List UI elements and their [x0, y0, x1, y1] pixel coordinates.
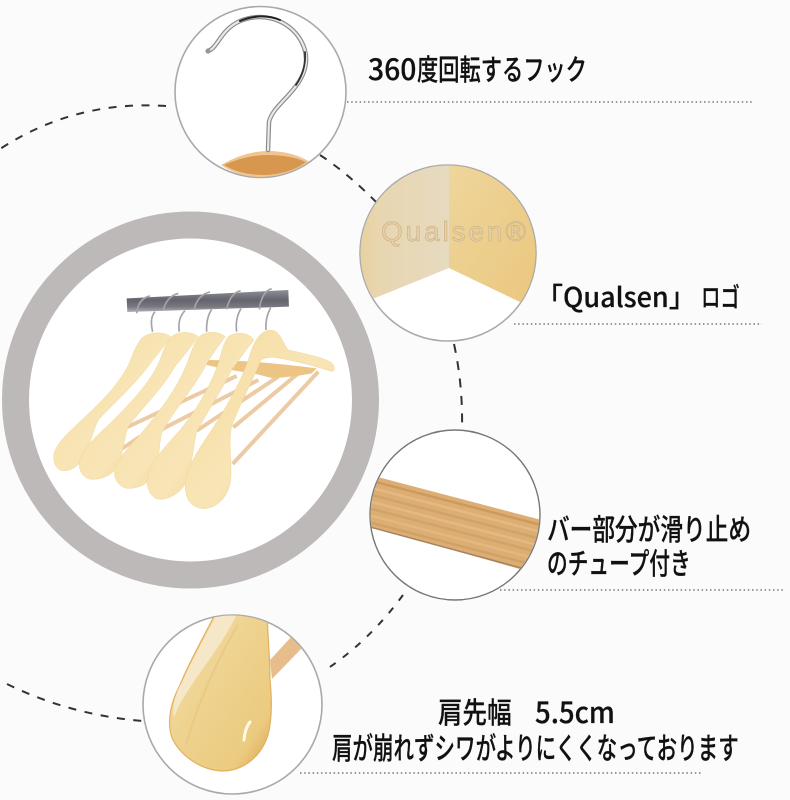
striped non-slip bar — [370, 478, 540, 569]
rail — [127, 290, 289, 312]
dashed connector: hook circle to logo circle — [320, 155, 378, 204]
right wood face — [449, 166, 536, 302]
dashed connector: left to hook circle — [0, 105, 166, 149]
label: logo: 「Qualsen」 — [536, 276, 696, 315]
dashed connector: logo circle to bar circle — [454, 344, 462, 430]
gloss highlight — [244, 722, 250, 740]
illustration: five wooden hangers on a rail — [54, 289, 334, 509]
hanger arm 4 — [147, 333, 254, 499]
paddle — [170, 612, 271, 771]
panel: shoulder detail circle — [143, 612, 322, 794]
panel: logo detail circle — [359, 164, 537, 342]
label: hook: 度回転するフック — [417, 47, 587, 89]
label: shoulder width: 肩先幅 — [438, 689, 512, 732]
hanger arm 3 — [114, 332, 225, 488]
hanger top — [221, 151, 310, 178]
label: shoulder note: 肩が崩れずシワがよりにくくなっております — [332, 725, 739, 768]
panel: bar detail circle — [365, 430, 545, 600]
hanger arm 5 with shoulder — [185, 330, 334, 509]
left wood face — [360, 166, 449, 298]
logo text: Qualsen® — [381, 216, 526, 247]
label: shoulder width — [438, 689, 615, 732]
crossbar — [270, 636, 302, 679]
back bars — [120, 372, 318, 464]
hanger arm 1 — [54, 333, 171, 471]
icon: chrome hook — [205, 16, 306, 150]
panel: main hanger photo ring — [16, 225, 366, 575]
label: hook: 360 — [368, 48, 416, 89]
grain streak — [173, 612, 238, 718]
label: bar line 1: バー部分が滑り止め — [547, 505, 751, 549]
label: shoulder width: 5.5cm — [535, 690, 615, 732]
dotted rule: bar — [500, 589, 783, 591]
dashed connector: bar circle to shoulder circle — [327, 595, 403, 669]
back shoulders — [207, 360, 317, 378]
dashed connector: left to shoulder circle — [7, 684, 143, 721]
dotted rule: shoulder — [300, 772, 703, 774]
label: logo: ロゴ — [701, 276, 740, 315]
label: bar line 2: のチュープ付き — [547, 540, 691, 583]
hooks — [137, 289, 272, 332]
dotted rule: logo — [514, 323, 762, 325]
hanger arm 2 — [79, 332, 198, 479]
dotted rule: hook — [347, 101, 752, 103]
panel: hook detail circle — [175, 6, 346, 178]
